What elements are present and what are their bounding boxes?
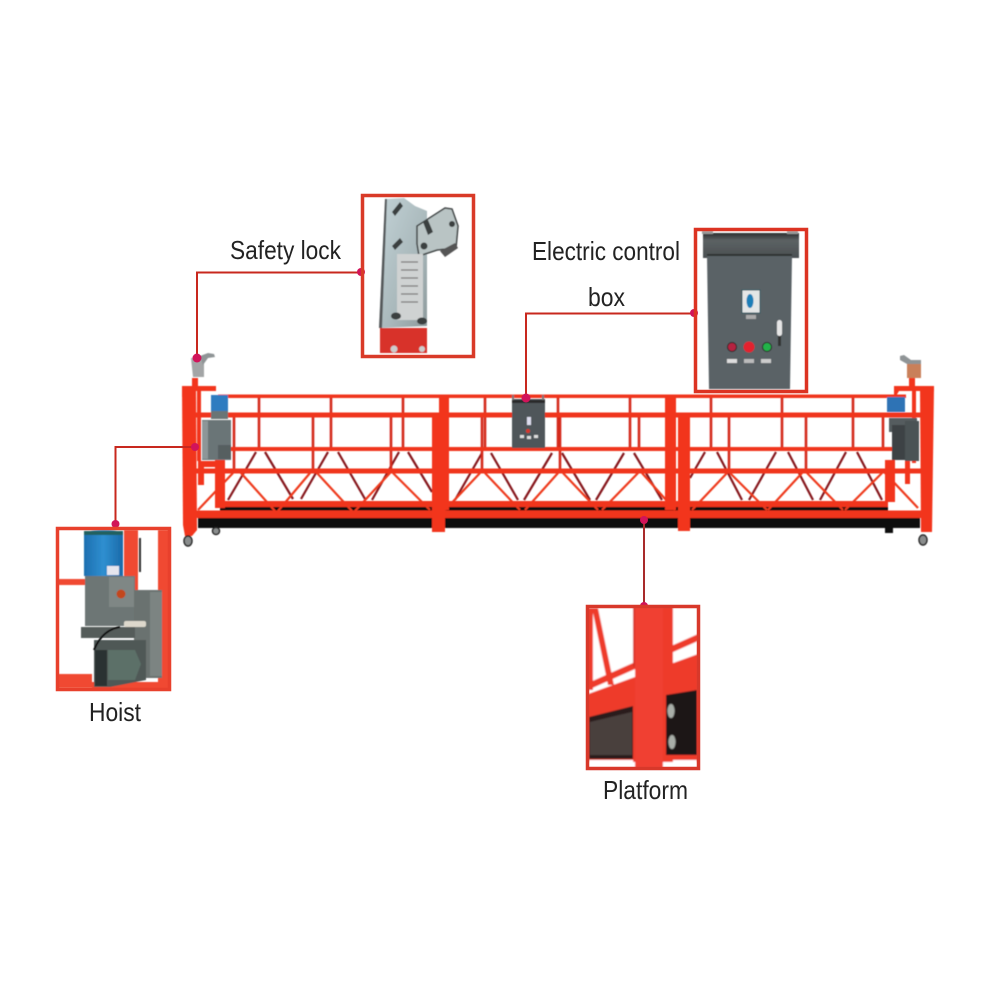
panel: electric control box <box>696 230 806 392</box>
right safety lock bracket <box>900 355 921 386</box>
hoist photo <box>58 530 169 690</box>
frame <box>588 606 698 768</box>
safety lock photo <box>379 198 458 353</box>
connector dots <box>112 268 698 610</box>
thin vertical balusters <box>234 397 883 471</box>
black underside beam <box>198 507 920 533</box>
label: hoist: Hoist <box>89 697 142 727</box>
control box on platform <box>512 395 545 448</box>
left safety lock bracket <box>191 353 215 386</box>
connector line: hoist <box>116 447 195 527</box>
panel: platform detail <box>588 606 698 768</box>
label: safety lock: Safety lock <box>230 235 342 265</box>
right hoist <box>887 397 919 461</box>
left hoist <box>202 395 231 460</box>
connector line: electric control box <box>526 314 694 398</box>
horizontal rails <box>188 394 926 518</box>
frame <box>362 196 474 356</box>
back truss diagonals <box>228 452 882 500</box>
platform photo <box>588 607 698 768</box>
label: electric control box <box>532 236 680 312</box>
frame <box>696 230 806 392</box>
support posts <box>182 386 934 536</box>
label line one: Electric control <box>532 236 680 266</box>
front truss diagonals <box>198 473 918 511</box>
connector line: platform <box>643 520 645 605</box>
panel: hoist <box>58 528 170 690</box>
casters <box>184 528 927 546</box>
panel: safety lock <box>362 196 474 356</box>
connector line: safety lock <box>197 272 361 359</box>
frame <box>58 528 170 690</box>
suspended platform <box>182 353 934 546</box>
cabinet photo <box>702 231 799 389</box>
label line two: box <box>588 282 625 312</box>
label: platform: Platform <box>603 775 688 805</box>
